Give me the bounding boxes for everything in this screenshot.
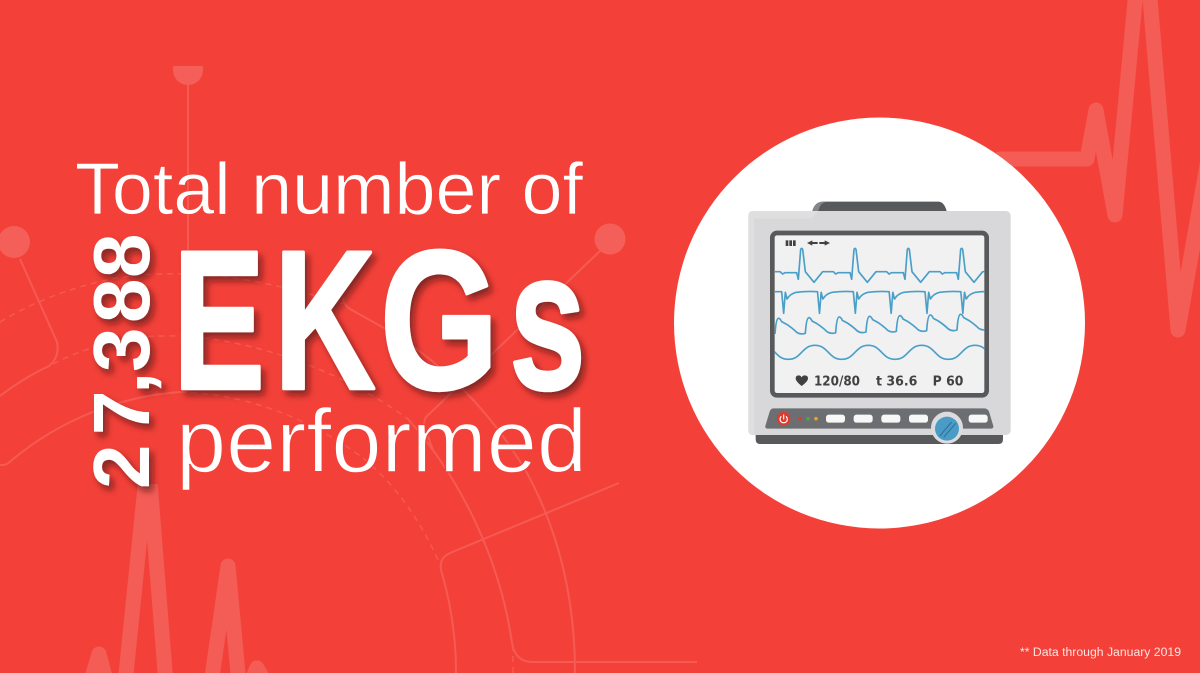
blue dial — [931, 412, 963, 444]
icon: node right — [594, 224, 626, 254]
control panel — [765, 408, 993, 444]
heading: EKGs — [173, 210, 585, 432]
readout: blood pressure: 120/80 — [814, 375, 860, 390]
icon: patient monitor — [748, 202, 1011, 444]
icon: node top — [173, 66, 203, 85]
icon: heart — [796, 375, 808, 386]
heading: EKGs: E — [173, 211, 265, 431]
indicator lights — [798, 417, 818, 420]
white circle — [674, 118, 1085, 528]
heading: total number of: Total number of — [75, 147, 584, 230]
panel buttons — [826, 415, 988, 423]
heading: performed: performed — [176, 392, 587, 492]
monitor body — [748, 211, 1011, 435]
screen icons — [786, 240, 830, 246]
footnote: ** Data through January 2019 — [1020, 647, 1181, 659]
monitor screen — [772, 233, 987, 395]
heading: EKGs: K — [274, 211, 376, 431]
screen readouts — [796, 375, 963, 390]
background ECG trace: bottom left — [90, 457, 266, 673]
background ECG trace: top right — [1000, 0, 1200, 330]
monitor handle — [812, 202, 947, 211]
power button — [777, 412, 790, 425]
readout: temperature: t 36.6 — [876, 375, 917, 390]
readout: pulse: P 60 — [933, 375, 963, 390]
icon: node left — [0, 226, 30, 258]
monitor base — [756, 433, 1003, 444]
number: 27,388: 27,388 — [77, 234, 166, 489]
heading: EKGs: G — [380, 210, 499, 431]
background decoration: circuit lines — [0, 80, 697, 673]
waveforms — [774, 248, 984, 360]
heading: EKGs: s — [510, 210, 585, 432]
